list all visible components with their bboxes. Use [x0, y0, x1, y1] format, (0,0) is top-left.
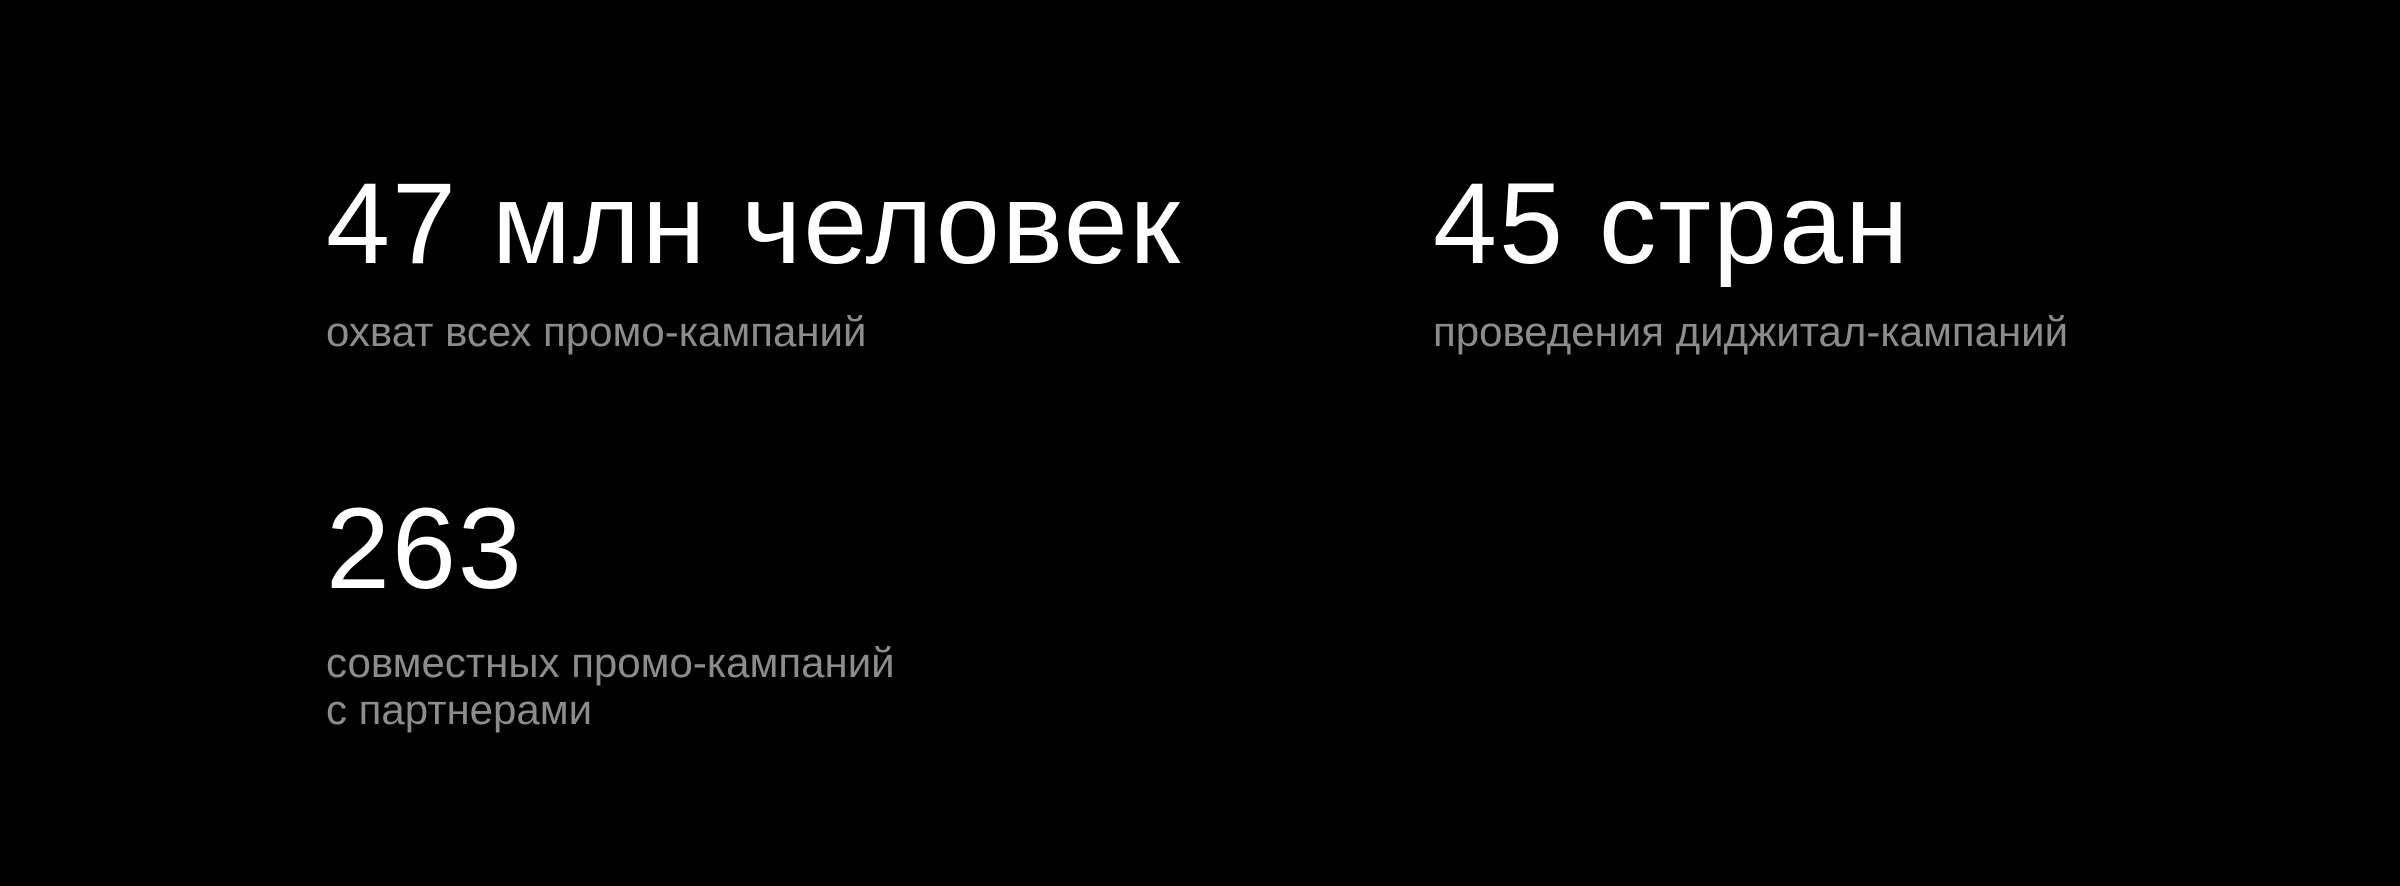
stat: 47 million people	[326, 160, 1182, 355]
caption: joint promo campaigns	[326, 639, 895, 733]
caption: joint promo campaigns: совместных промо-кампаний	[326, 639, 895, 686]
caption: reach: охват всех промо-кампаний	[326, 308, 866, 355]
stat: 263	[326, 485, 895, 733]
caption: digital campaigns: проведения диджитал-кампаний	[1433, 308, 2068, 355]
heading: 47 млн человек: 47 млн человек	[326, 160, 1182, 288]
caption: joint promo campaigns: с партнерами	[326, 686, 592, 733]
heading: 45 стран: 45 стран	[1433, 160, 1910, 288]
stat: 45 countries	[1433, 160, 2068, 355]
heading: 263: 263	[326, 485, 524, 613]
